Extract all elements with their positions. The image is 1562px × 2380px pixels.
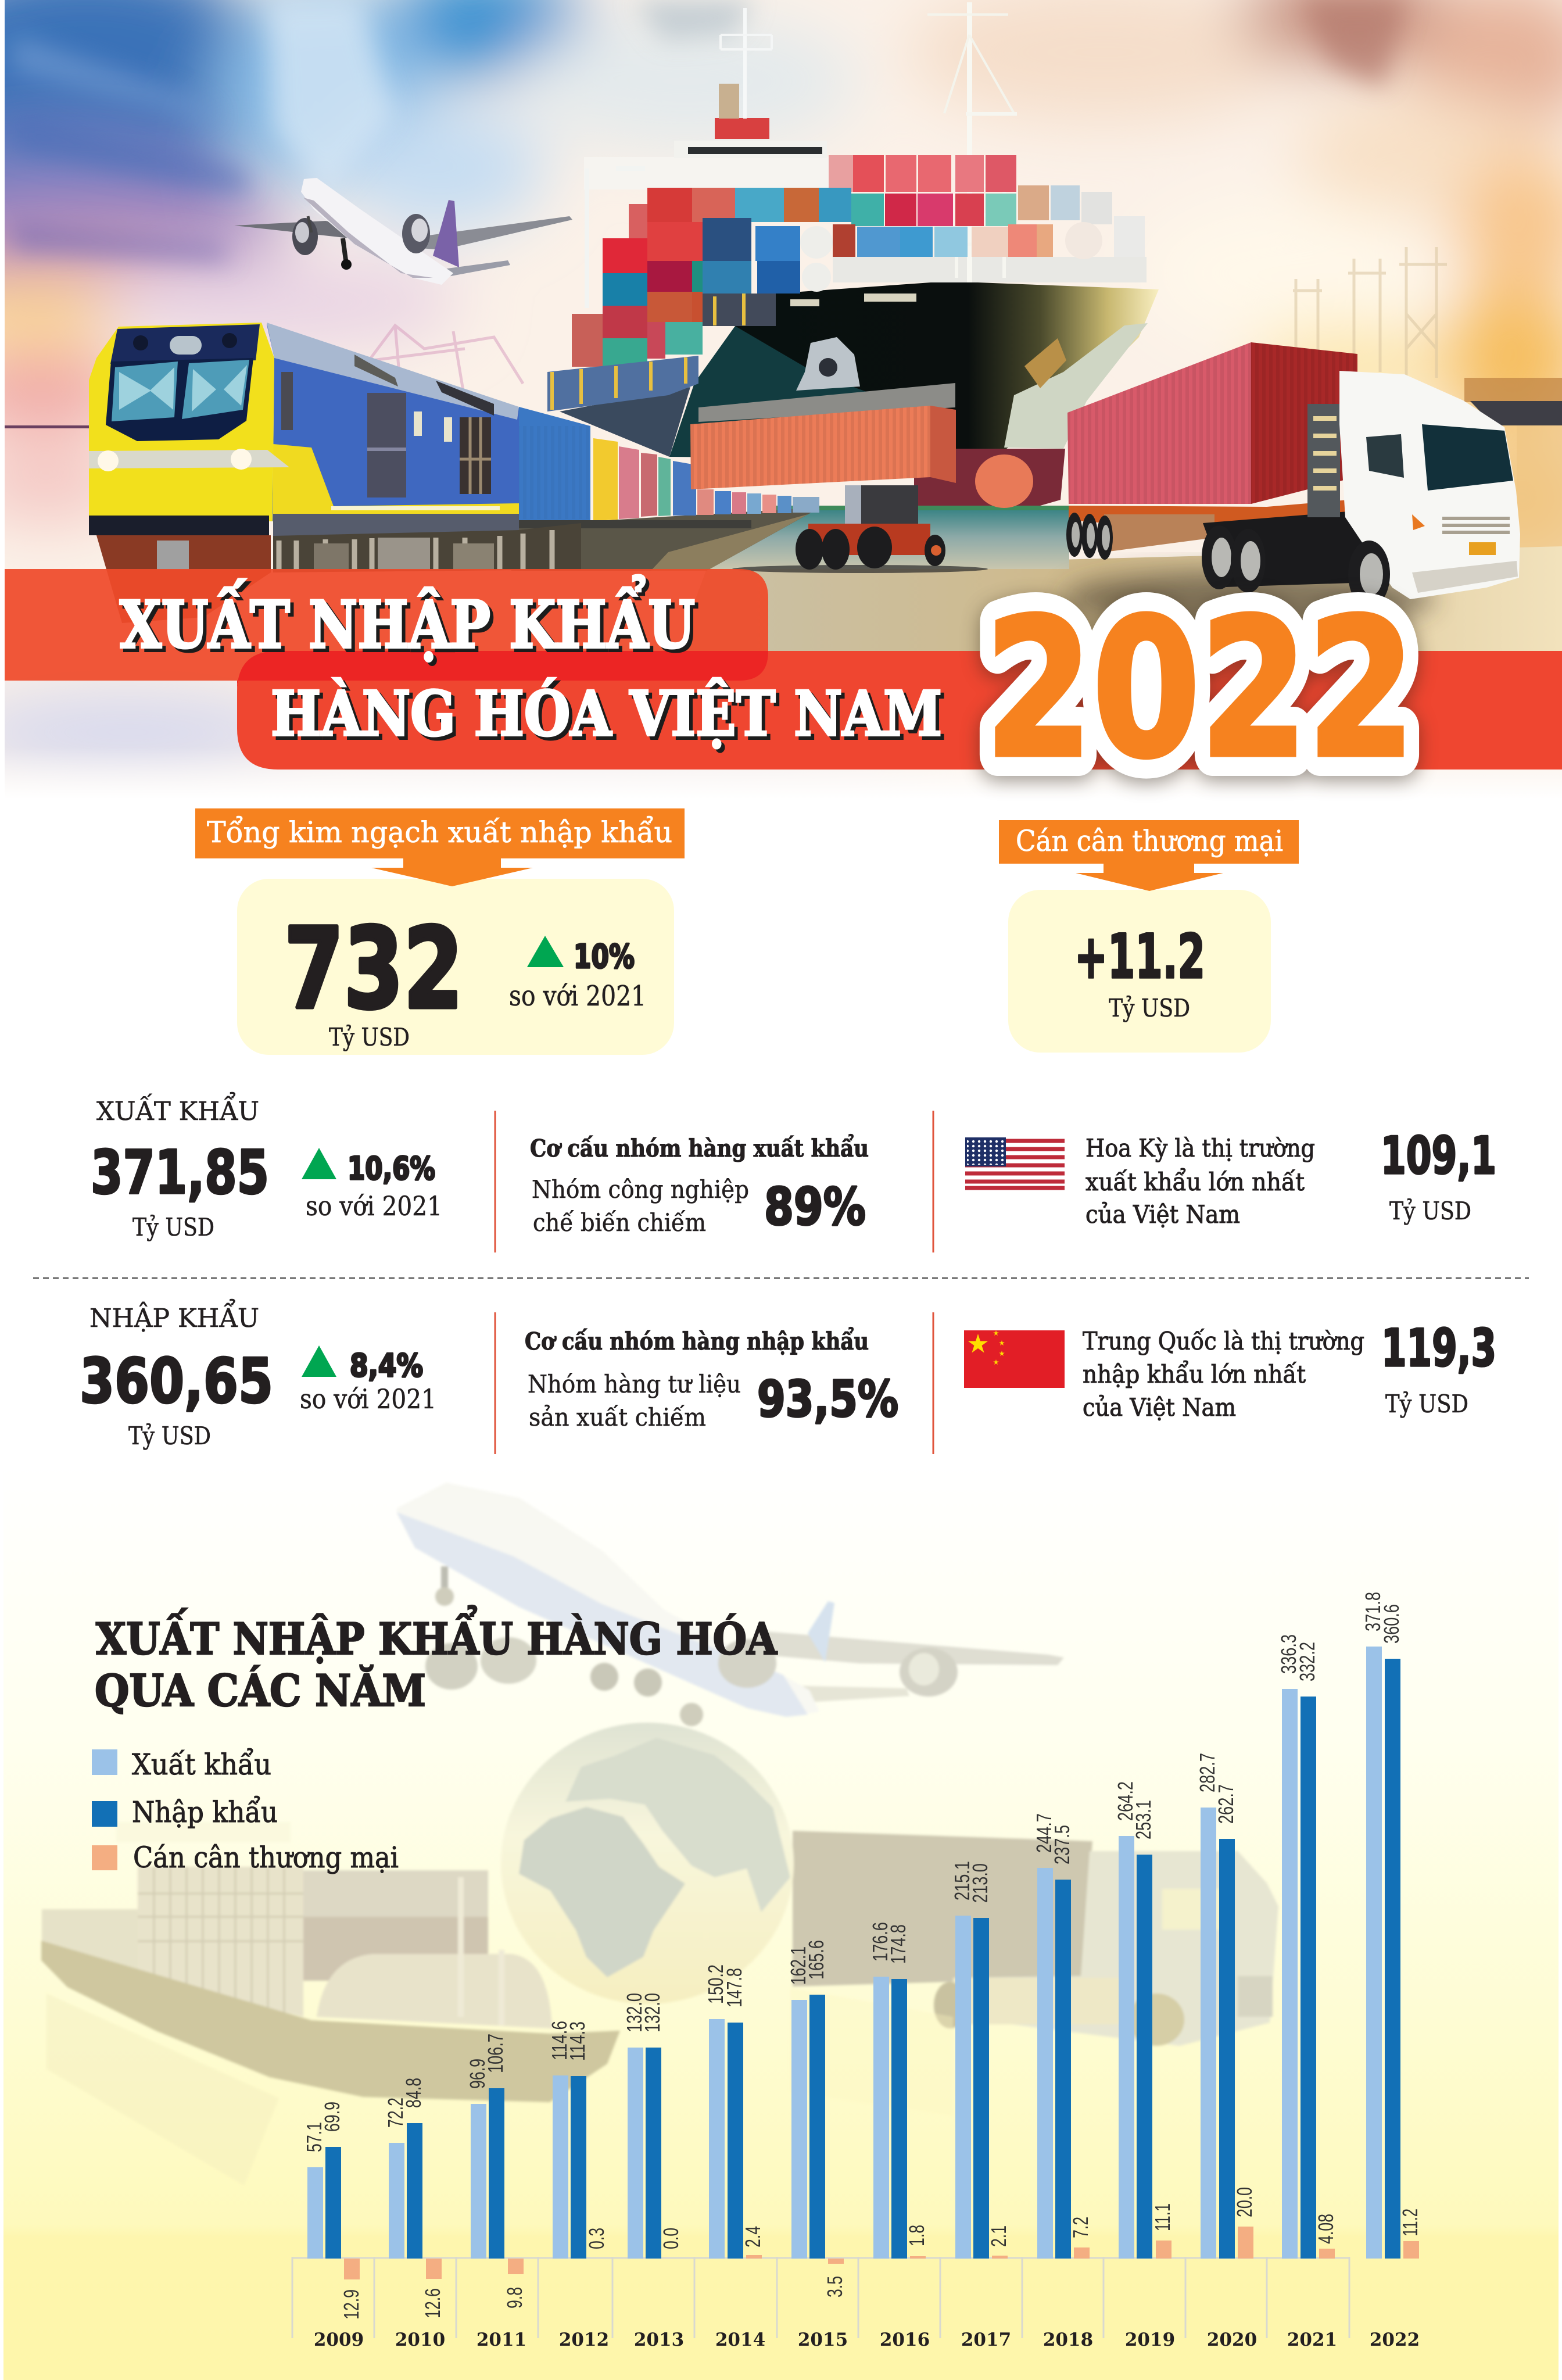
- import structure text: [528, 1370, 741, 1431]
- year 2017: 2017: [961, 2329, 1011, 2350]
- heading banner with arrow: Cán cân thương mại: [1016, 824, 1283, 858]
- year 2018: 2018: [1043, 2329, 1093, 2350]
- year 2019: 264.2: [1113, 1781, 1137, 1821]
- year 2011: 96.9: [465, 2059, 489, 2089]
- year 2022: 11.2: [1398, 2209, 1422, 2236]
- stacked containers: [547, 155, 1145, 411]
- year 2017: 215.1: [950, 1861, 974, 1901]
- export structure text: [532, 1175, 749, 1237]
- year 2011: 2011: [477, 2329, 526, 2350]
- sky: [0, 0, 1562, 814]
- year 2021: 332.2: [1295, 1642, 1319, 1681]
- icon: China flag: [964, 1330, 1065, 1388]
- year 2009: 2009: [314, 2329, 364, 2350]
- year 2012: [547, 2021, 609, 2350]
- legend: Nhập khẩu: [132, 1795, 278, 1829]
- year 2016: 1.8: [905, 2225, 929, 2246]
- year 2010: 84.8: [402, 2078, 425, 2108]
- up arrow: [302, 1148, 336, 1179]
- top export market text: [1085, 1134, 1315, 1229]
- hero illustration: [0, 0, 1562, 814]
- year 2019: 11.1: [1151, 2203, 1174, 2231]
- year 2022: 360.6: [1380, 1604, 1403, 1644]
- export structure text: chế biến chiếm: [533, 1208, 706, 1237]
- truck with red container: [1063, 342, 1520, 628]
- year 2013: 2013: [634, 2329, 684, 2350]
- ground: [710, 506, 1562, 651]
- year 2016: 176.6: [868, 1922, 892, 1962]
- legend: [92, 1748, 399, 1874]
- year 2022: 2022: [985, 578, 1415, 799]
- red bar upper: [5, 569, 768, 681]
- year 2022: 371.8: [1361, 1592, 1385, 1631]
- cloud streaks: [12, 0, 1406, 262]
- year 2022: [1361, 1592, 1422, 2350]
- year 2020: [1195, 1753, 1257, 2350]
- year 2016: [868, 1922, 930, 2350]
- year 2015: [786, 1940, 848, 2350]
- year 2018: 237.5: [1050, 1825, 1074, 1864]
- legend: Cán cân thương mại: [133, 1841, 399, 1874]
- year 2021: 336.3: [1277, 1634, 1301, 1674]
- top export market text: Hoa Kỳ là thị trường: [1085, 1134, 1315, 1162]
- rail bed: [511, 507, 821, 571]
- horizon line: [5, 425, 92, 428]
- value: +11.2: [1074, 921, 1205, 992]
- top import market text: [1083, 1327, 1364, 1422]
- year 2017: 213.0: [968, 1863, 992, 1903]
- year 2014: 147.8: [722, 1968, 746, 2007]
- unit: Tỷ USD: [1389, 1197, 1471, 1225]
- chart title: QUA CÁC NĂM: [95, 1665, 426, 1716]
- distant port cranes: [360, 247, 1447, 401]
- plane: [234, 178, 572, 285]
- card: [1008, 890, 1271, 1053]
- import share: 93,5%: [757, 1370, 898, 1429]
- icon: US flag: [965, 1137, 1065, 1190]
- year 2021: 2021: [1287, 2329, 1337, 2350]
- year 2014: 150.2: [704, 1964, 728, 2004]
- year 2015: 2015: [798, 2329, 848, 2350]
- year 2020: 20.0: [1233, 2187, 1256, 2217]
- year 2021: 4.08: [1314, 2214, 1338, 2244]
- locomotive undercarriage: [96, 535, 271, 623]
- export structure heading: Cơ cấu nhóm hàng xuất khẩu: [530, 1134, 869, 1162]
- locomotive side: [267, 323, 581, 572]
- year 2018: 244.7: [1032, 1813, 1056, 1853]
- panel: trade balance: [999, 820, 1299, 1053]
- chart title: XUẤT NHẬP KHẨU HÀNG HÓA: [96, 1605, 778, 1665]
- locomotive front: [89, 323, 289, 535]
- year 2019: 253.1: [1131, 1800, 1155, 1839]
- year 2018: 7.2: [1069, 2217, 1092, 2238]
- ghost plane: [397, 1483, 1064, 1726]
- card: [237, 879, 674, 1055]
- year 2015: 162.1: [786, 1946, 810, 1985]
- unit: Tỷ USD: [329, 1023, 410, 1051]
- year 2013: 132.0: [622, 1993, 646, 2032]
- ghost globe: [501, 1723, 794, 2004]
- year 2011: [465, 2034, 526, 2350]
- heading banner with arrow: Tổng kim ngạch xuất nhập khẩu: [207, 815, 672, 849]
- year 2009: [302, 2102, 364, 2350]
- year 2011: 106.7: [483, 2034, 507, 2073]
- background illustration: plane globe ship truck: [41, 1483, 1278, 2185]
- year 2011: 9.8: [503, 2287, 526, 2309]
- far harbour: [1464, 378, 1562, 565]
- year 2016: 174.8: [886, 1924, 910, 1964]
- top export market text: của Việt Nam: [1085, 1200, 1240, 1229]
- growth: 10,6%: [347, 1150, 435, 1187]
- panel: exports row: [91, 1091, 1496, 1241]
- year 2010: 72.2: [384, 2098, 407, 2128]
- year 2022: 2022: [1370, 2329, 1420, 2350]
- year 2012: 0.3: [585, 2228, 608, 2249]
- year 2020: 2020: [1207, 2329, 1257, 2350]
- ship hull: [560, 281, 1159, 508]
- export label: XUẤT KHẨU: [96, 1091, 259, 1126]
- heading banner with arrow: [195, 808, 685, 886]
- year 2019: 2019: [1125, 2329, 1175, 2350]
- year 2019: [1113, 1781, 1175, 2350]
- lower fade to white: [0, 747, 1562, 814]
- chart section background: [3, 1465, 1559, 2380]
- panel: total trade: [195, 808, 685, 1055]
- year 2009: 57.1: [302, 2122, 326, 2152]
- unit: Tỷ USD: [1109, 994, 1190, 1022]
- title line 1: XUẤT NHẬP KHẨU: [120, 576, 695, 663]
- year 2014: 2.4: [741, 2226, 765, 2247]
- year 2010: [384, 2078, 445, 2350]
- top export market text: xuất khẩu lớn nhất: [1085, 1168, 1305, 1196]
- import structure text: sản xuất chiếm: [529, 1403, 706, 1431]
- legend: Xuất khẩu: [132, 1748, 271, 1781]
- year 2012: 114.6: [547, 2021, 571, 2060]
- chart title: [95, 1605, 778, 1716]
- value: 732: [284, 905, 463, 1034]
- unit: Tỷ USD: [132, 1213, 214, 1241]
- top import market text: Trung Quốc là thị trường: [1083, 1327, 1364, 1355]
- orange container and forklift: [690, 337, 988, 573]
- year 2014: 2014: [715, 2329, 765, 2350]
- title banner: [5, 569, 1562, 799]
- year 2017: [950, 1861, 1011, 2350]
- year 2017: 2.1: [987, 2225, 1011, 2247]
- year 2010: 2010: [395, 2329, 445, 2350]
- title line 2: HÀNG HÓA VIỆT NAM: [271, 677, 942, 750]
- year 2018: [1032, 1813, 1093, 2350]
- up arrow: [302, 1345, 336, 1377]
- year 2013: [622, 1993, 684, 2350]
- export share: 89%: [764, 1177, 866, 1237]
- comparison: so với 2021: [300, 1383, 436, 1415]
- top export market value: 109,1: [1381, 1126, 1496, 1186]
- year 2009: 69.9: [320, 2102, 344, 2132]
- export structure text: Nhóm công nghiệp: [532, 1175, 749, 1204]
- year 2020: 282.7: [1195, 1753, 1219, 1792]
- panel: imports row: [80, 1298, 1496, 1450]
- top import market text: của Việt Nam: [1083, 1393, 1236, 1422]
- freight train: [89, 323, 821, 623]
- year 2020: 262.7: [1214, 1784, 1238, 1824]
- year 2015: 3.5: [823, 2276, 847, 2297]
- year 2012: 114.3: [565, 2021, 589, 2061]
- year 2022: 2022: [985, 578, 1415, 799]
- ghost ship: [41, 1822, 620, 2185]
- import structure text: Nhóm hàng tư liệu: [528, 1370, 741, 1398]
- year 2010: 12.6: [421, 2288, 445, 2318]
- heading banner with arrow: [999, 820, 1299, 891]
- unit: Tỷ USD: [128, 1422, 211, 1450]
- import value: 360,65: [80, 1345, 273, 1417]
- growth: 8,4%: [350, 1347, 423, 1384]
- container ship: [547, 2, 1159, 508]
- up arrow: [527, 936, 564, 967]
- year 2015: 165.6: [804, 1940, 828, 1980]
- year 2012: 2012: [559, 2329, 609, 2350]
- unit: Tỷ USD: [1385, 1390, 1468, 1418]
- year 2014: [704, 1964, 765, 2350]
- comparison: so với 2021: [509, 980, 646, 1012]
- year 2021: [1277, 1634, 1338, 2350]
- top import market value: 119,3: [1381, 1318, 1496, 1378]
- year 2016: 2016: [880, 2329, 930, 2350]
- year 2013: 132.0: [640, 1993, 664, 2032]
- top import market text: nhập khẩu lớn nhất: [1083, 1360, 1306, 1388]
- import structure heading: Cơ cấu nhóm hàng nhập khẩu: [525, 1327, 869, 1355]
- import label: NHẬP KHẨU: [89, 1298, 259, 1333]
- comparison: so với 2021: [306, 1190, 442, 1222]
- export value: 371,85: [91, 1138, 269, 1208]
- ghost truck: [790, 1831, 1278, 2116]
- bar overlap: [237, 651, 768, 692]
- red bar lower: [237, 651, 1562, 770]
- bar chart: [292, 1592, 1422, 2350]
- growth: 10%: [574, 938, 635, 976]
- year 2009: 12.9: [339, 2289, 363, 2320]
- year 2013: 0.0: [659, 2228, 683, 2249]
- freight containers: [519, 407, 819, 528]
- ship superstructure and masts: [584, 2, 1147, 308]
